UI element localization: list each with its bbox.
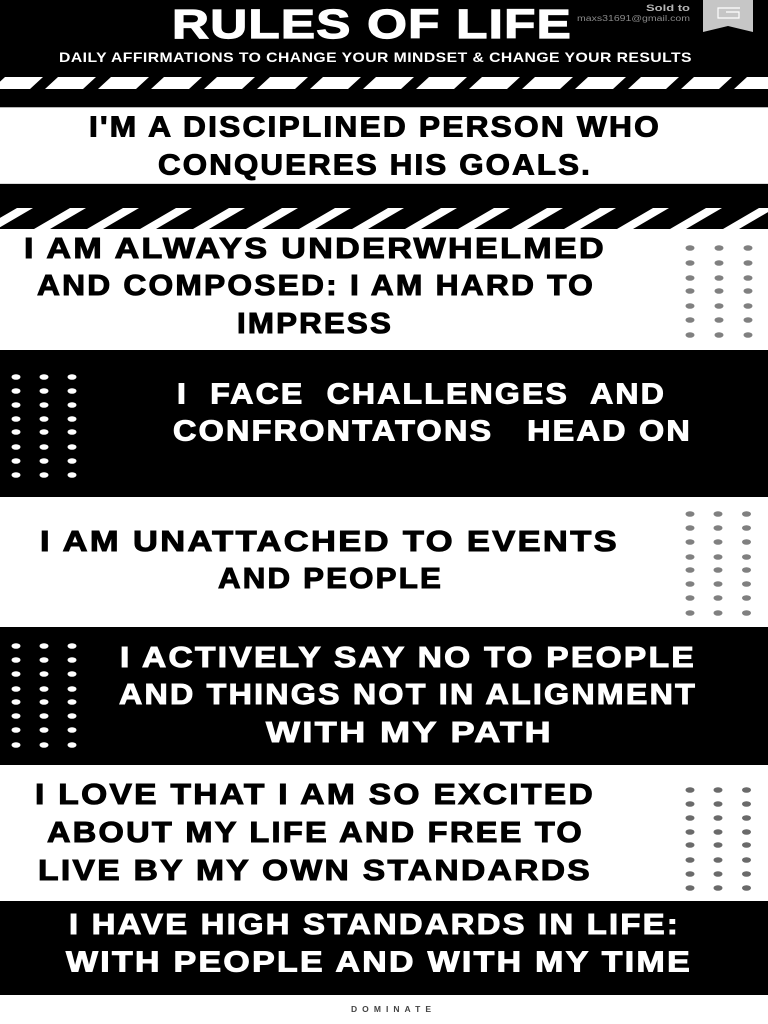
panel: face challenges: CONFRONTATONS HEAD ON [173,416,692,448]
title: RULES OF LIFE [172,1,572,47]
panel: unattached: AND PEOPLE [218,563,443,595]
dot grid: white, say no panel [12,643,76,748]
panel: high standards: I HAVE HIGH STANDARDS IN LIFE: [69,909,680,941]
panel: say no: AND THINGS NOT IN ALIGNMENT [119,679,697,711]
panel: unattached: I AM UNATTACHED TO EVENTS [40,526,619,558]
panel: say no: I ACTIVELY SAY NO TO PEOPLE [120,642,696,674]
panel: face challenges: I FACE CHALLENGES AND [177,378,666,410]
panel: love my life: LIVE BY MY OWN STANDARDS [38,855,592,887]
panel: underwhelmed and composed: IMPRESS [237,308,393,340]
panel: high standards: WITH PEOPLE AND WITH MY TIME [66,946,692,978]
top hazard stripes [0,77,768,89]
footer: dominate: DOMINATE [351,1004,431,1014]
panel: underwhelmed and composed: I AM ALWAYS UNDERWHELMED [24,233,606,265]
panel: unattached [40,526,619,595]
icon: bookmark badge [703,0,753,32]
sold to label [577,3,690,23]
divider band with hazard stripes [0,184,768,229]
dot grid: dark grey, love my life panel [686,787,751,891]
panel: disciplined person: I'M A DISCIPLINED PERSON WHO [89,112,661,144]
panel: underwhelmed and composed [24,233,606,340]
sold to label: Sold to [646,3,690,14]
panel: say no [0,627,768,765]
dot grid: grey, first white panel [686,245,752,338]
sold to label: maxs31691@gmail.com [577,14,690,23]
panel: say no: WITH MY PATH [266,717,553,749]
header panel [0,0,768,107]
panel: high standards [0,901,768,995]
dot grid: grey, unattached panel [686,511,751,616]
panel: love my life [35,779,595,887]
dot grid: white, face challenges panel [12,374,76,478]
panel: underwhelmed and composed: AND COMPOSED: I AM HARD TO [37,270,595,302]
panel: disciplined person: CONQUERES HIS GOALS. [158,150,592,182]
panel: disciplined person [0,107,768,184]
panel: love my life: ABOUT MY LIFE AND FREE TO [47,817,584,849]
subtitle: DAILY AFFIRMATIONS TO CHANGE YOUR MINDSET & CHANGE YOUR RESULTS [59,49,692,65]
panel: face challenges [0,350,768,497]
panel: love my life: I LOVE THAT I AM SO EXCITED [35,779,595,811]
